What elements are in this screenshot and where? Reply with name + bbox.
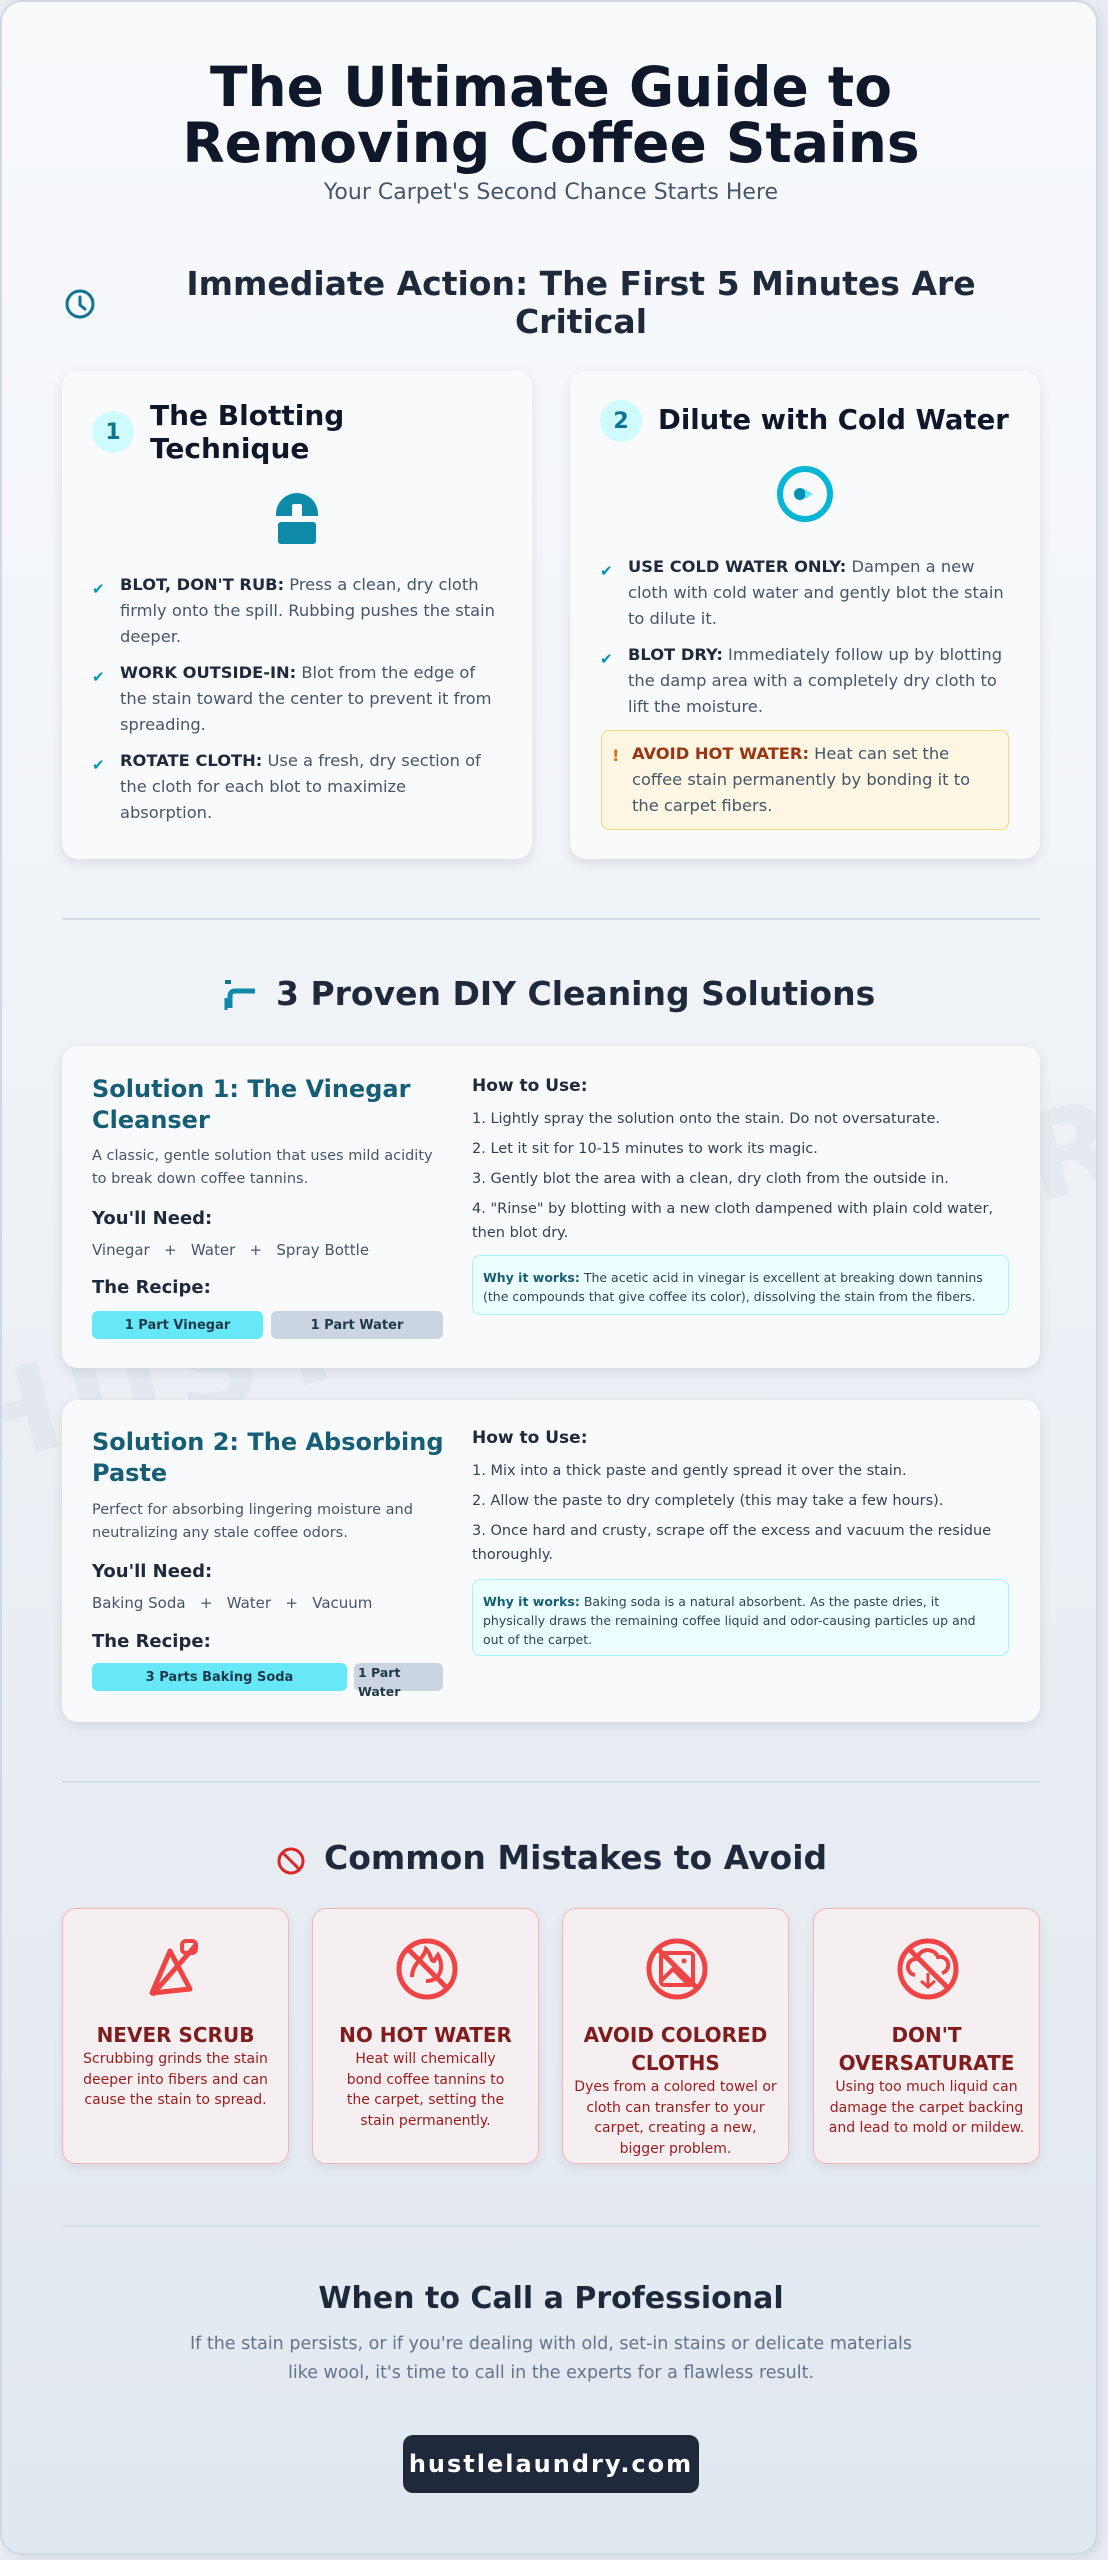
bullets: ✔ <box>600 562 613 580</box>
bullets: WORK OUTSIDE-IN: Blot from the edge of the stain toward the center to prevent it from spreading. <box>120 663 491 734</box>
panel: solution 1: 1. Lightly spray the solution onto the stain. Do not oversaturate. <box>472 1111 940 1127</box>
text: professional advice: If the stain persists, or if you're dealing with old, set-in stains or delicate materials like wool, it's time to call in the experts for a flawless result. <box>190 2334 912 2383</box>
mistake card: oversaturate: Using too much liquid can damage the carpet backing and lead to mold or mildew. <box>829 2079 1024 2136</box>
icon: water target <box>777 466 833 522</box>
solution 1 title <box>92 1075 410 1134</box>
icon: prohibited <box>278 1848 304 1874</box>
button: website: hustlelaundry.com <box>409 2450 693 2478</box>
heading: call a professional: When to Call a Professional <box>318 2281 784 2316</box>
mistake card: no hot water: Heat will chemically bond coffee tannins to the carpet, setting the stain permanently. <box>347 2051 504 2128</box>
panel: solution 2: 1. Mix into a thick paste and gently spread it over the stain. <box>472 1463 907 1479</box>
why it works <box>472 1579 1009 1656</box>
mistake card: colored cloths <box>562 1908 789 2164</box>
why it works: Why it works: The acetic acid in vinegar is excellent at breaking down tannins (the compounds that give coffee its color), dissolving the stain from the fibers. <box>483 1270 983 1304</box>
number 1: 1 <box>105 420 121 444</box>
section heading: immediate action: Immediate Action: The First 5 Minutes Are Critical <box>186 264 976 341</box>
bullets: ✔ <box>92 756 105 774</box>
panel: solution 1: 3. Gently blot the area with a clean, dry cloth from the outside in. <box>472 1171 949 1187</box>
mistake card: colored cloths: AVOID COLORED CLOTHS <box>584 2023 767 2075</box>
panel: solution 1: 4. "Rinse" by blotting with a new cloth dampened with plain cold water, then blot dry. <box>472 1201 993 1241</box>
title <box>182 55 920 175</box>
recipe bar: 1 Part Vinegar <box>125 1318 230 1332</box>
mistake card: never scrub: Scrubbing grinds the stain deeper into fibers and can cause the stain to spread. <box>83 2051 268 2108</box>
solution 2 title: Solution 2: The Absorbing <box>92 1428 444 1456</box>
section heading: mistakes: Common Mistakes to Avoid <box>324 1838 827 1877</box>
callout: avoid hot water: AVOID HOT WATER: Heat can set the coffee stain permanently by bonding it to the carpet fibers. <box>632 744 970 815</box>
mistake card: oversaturate <box>813 1908 1040 2164</box>
icon: spray <box>224 980 255 1010</box>
icon: no cloud rain <box>898 1938 958 2000</box>
mistake card: colored cloths: Dyes from a colored towel or cloth can transfer to your carpet, creating a new, bigger problem. <box>574 2079 777 2156</box>
title: Removing Coffee Stains <box>182 111 920 175</box>
description: A classic, gentle solution that uses mild acidity to break down coffee tannins. <box>92 1148 433 1187</box>
recipe bar <box>92 1663 443 1699</box>
bullets: ROTATE CLOTH: Use a fresh, dry section of the cloth for each blot to maximize <box>120 751 481 796</box>
panel: solution 2: Water <box>358 1684 400 1699</box>
bullets <box>600 557 1004 716</box>
section heading: DIY solutions: 3 Proven DIY Cleaning Solutions <box>276 974 875 1013</box>
bullets: USE COLD WATER ONLY: Dampen a new cloth with cold water and gently blot the stain to dilute it. <box>628 557 1004 628</box>
number 1 <box>92 411 134 453</box>
panel: solution 2: 3. Once hard and crusty, scrape off the excess and vacuum the residue thoroughly. <box>472 1523 991 1563</box>
how to use: How to Use: <box>472 1428 588 1448</box>
number 2 <box>600 400 642 442</box>
solution 2 title: Paste <box>92 1459 167 1487</box>
how to use: How to Use: <box>472 1076 588 1096</box>
description: Perfect for absorbing lingering moisture and neutralizing any stale coffee odors. <box>92 1502 413 1541</box>
recipe bar <box>92 1311 443 1339</box>
heading: The Blotting <box>150 399 344 432</box>
solution 2 title <box>92 1428 444 1487</box>
bullets: BLOT, DON'T RUB: Press a clean, dry cloth firmly onto the spill. Rubbing pushes the stain deeper. <box>120 575 495 646</box>
callout: avoid hot water: ! <box>612 746 619 765</box>
solution 1 title: Solution 1: The Vinegar <box>92 1075 410 1103</box>
needs: You'll Need: <box>92 1208 212 1229</box>
icon: no image <box>646 1938 708 2000</box>
bullets <box>92 575 495 822</box>
recipe bar: 1 Part Water <box>311 1318 403 1332</box>
title: The Ultimate Guide to <box>210 55 892 119</box>
icon: blot <box>276 493 318 544</box>
panel: dilute with cold water <box>570 371 1040 859</box>
subtitle: Your Carpet's Second Chance Starts Here <box>324 180 778 205</box>
heading <box>150 399 344 465</box>
recipe bar: 3 Parts Baking Soda <box>146 1670 293 1684</box>
solution 1 title: Cleanser <box>92 1106 210 1134</box>
recipe bar: 1 Part <box>358 1665 400 1680</box>
callout: avoid hot water <box>601 730 1009 830</box>
mistake card: never scrub <box>62 1908 289 2164</box>
button: website <box>403 2435 699 2493</box>
why it works: Why it works: Baking soda is a natural absorbent. As the paste dries, it physically draws the remaining coffee liquid and odor-causing particles up and out of the carpet. <box>483 1594 976 1647</box>
needs: You'll Need: <box>92 1561 212 1582</box>
bullets: BLOT DRY: Immediately follow up by blotting the damp area with a completely dry cloth to lift the moisture. <box>628 645 1002 716</box>
icon: no flame <box>396 1938 458 2000</box>
panel: solution 1: The Recipe: <box>92 1277 211 1298</box>
bullets: ✔ <box>92 580 105 598</box>
mistake card: no hot water: NO HOT WATER <box>339 2023 512 2047</box>
panel: solution 2: The Recipe: <box>92 1631 211 1652</box>
icon: brush crossed <box>150 1939 198 1997</box>
icon: clock <box>66 290 94 318</box>
panel: solution 1: 2. Let it sit for 10-15 minutes to work its magic. <box>472 1141 818 1157</box>
mistake card: oversaturate: DON'T OVERSATURATE <box>839 2023 1014 2075</box>
mistake card: no hot water <box>312 1908 539 2164</box>
panel: solution 2: 2. Allow the paste to dry completely (this may take a few hours). <box>472 1493 943 1509</box>
bullets: ✔ <box>600 650 613 668</box>
heading: Dilute with Cold Water <box>658 404 1009 436</box>
panel: solution 2 <box>62 1400 1040 1722</box>
panel: solution 2: Baking Soda + Water + Vacuum <box>92 1594 372 1612</box>
panel: solution 1 <box>62 1046 1040 1368</box>
heading: Technique <box>150 432 309 465</box>
bullets: absorption. <box>120 803 212 822</box>
number 2: 2 <box>613 408 629 434</box>
mistake card: never scrub: NEVER SCRUB <box>97 2023 254 2047</box>
panel: blotting technique <box>62 371 532 859</box>
why it works <box>472 1255 1009 1315</box>
bullets: ✔ <box>92 668 105 686</box>
panel: solution 1: Vinegar + Water + Spray Bottle <box>92 1241 369 1259</box>
